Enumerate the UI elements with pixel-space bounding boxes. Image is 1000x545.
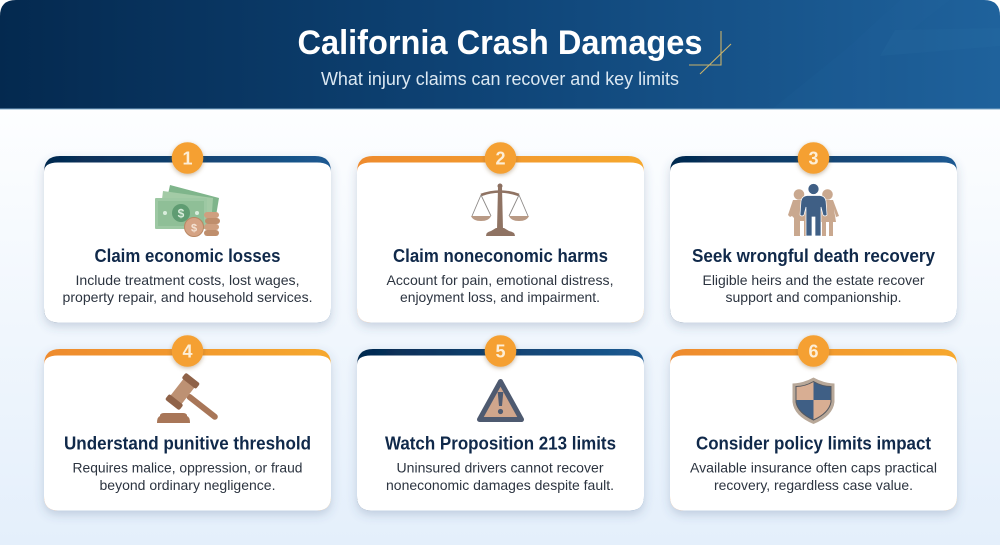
panel: card 1 economic losses xyxy=(44,142,331,322)
description xyxy=(702,273,925,305)
number badge 2 xyxy=(485,142,516,174)
heading: Seek wrongful death recovery xyxy=(692,246,935,266)
page background xyxy=(0,109,1000,545)
panel: card 6 policy limits xyxy=(670,335,957,510)
subtitle: What injury claims can recover and key limits xyxy=(321,69,679,89)
description: beyond ordinary negligence. xyxy=(100,478,276,493)
icon: warning triangle xyxy=(480,382,522,420)
header banner xyxy=(0,0,1000,110)
number badge 4: 4 xyxy=(182,342,193,362)
number badge 2: 2 xyxy=(495,148,506,168)
title: California Crash Damages xyxy=(298,24,702,62)
heading: Claim economic losses xyxy=(94,246,280,266)
description: Uninsured drivers cannot recover xyxy=(396,460,604,476)
panel: card 5 Proposition 213 xyxy=(357,335,644,510)
number badge 5 xyxy=(485,335,516,367)
heading: Watch Proposition 213 limits xyxy=(385,434,616,454)
icon: gavel xyxy=(157,373,228,432)
icon: cash and coins xyxy=(155,185,220,236)
description xyxy=(386,460,614,493)
panel: card 2 noneconomic harms xyxy=(357,142,644,322)
number badge 1: 1 xyxy=(182,148,193,168)
description xyxy=(690,460,937,493)
icon: cash and coins: $ xyxy=(191,222,197,234)
description: support and companionship. xyxy=(726,290,902,305)
number badge 6 xyxy=(798,335,829,367)
description: Requires malice, oppression, or fraud xyxy=(72,460,302,476)
icon: shield xyxy=(792,378,834,424)
icon: scales of justice xyxy=(471,184,529,236)
number badge 3 xyxy=(798,142,829,174)
description: Available insurance often caps practical xyxy=(690,460,937,476)
description: property repair, and household services. xyxy=(62,290,312,305)
description: noneconomic damages despite fault. xyxy=(386,478,614,493)
panel: card 3 wrongful death xyxy=(670,142,957,322)
gold accent lines xyxy=(689,31,731,74)
description: Eligible heirs and the estate recover xyxy=(702,273,925,288)
number badge 1 xyxy=(172,142,203,174)
description xyxy=(386,273,614,305)
icon: family group xyxy=(788,184,839,236)
heading: Claim noneconomic harms xyxy=(393,246,608,266)
number badge 4 xyxy=(172,335,203,367)
description: Include treatment costs, lost wages, xyxy=(76,273,300,288)
description xyxy=(72,460,302,493)
description: recovery, regardless case value. xyxy=(714,478,913,493)
panel: card 4 punitive threshold xyxy=(44,335,331,510)
description: Account for pain, emotional distress, xyxy=(386,273,614,288)
number badge 5: 5 xyxy=(495,342,506,362)
heading: Consider policy limits impact xyxy=(696,434,931,454)
icon: cash and coins: $ xyxy=(178,206,185,220)
description: enjoyment loss, and impairment. xyxy=(400,290,600,305)
number badge 6: 6 xyxy=(808,342,819,362)
number badge 3: 3 xyxy=(808,148,819,168)
heading: Understand punitive threshold xyxy=(64,434,311,454)
description xyxy=(62,273,312,305)
